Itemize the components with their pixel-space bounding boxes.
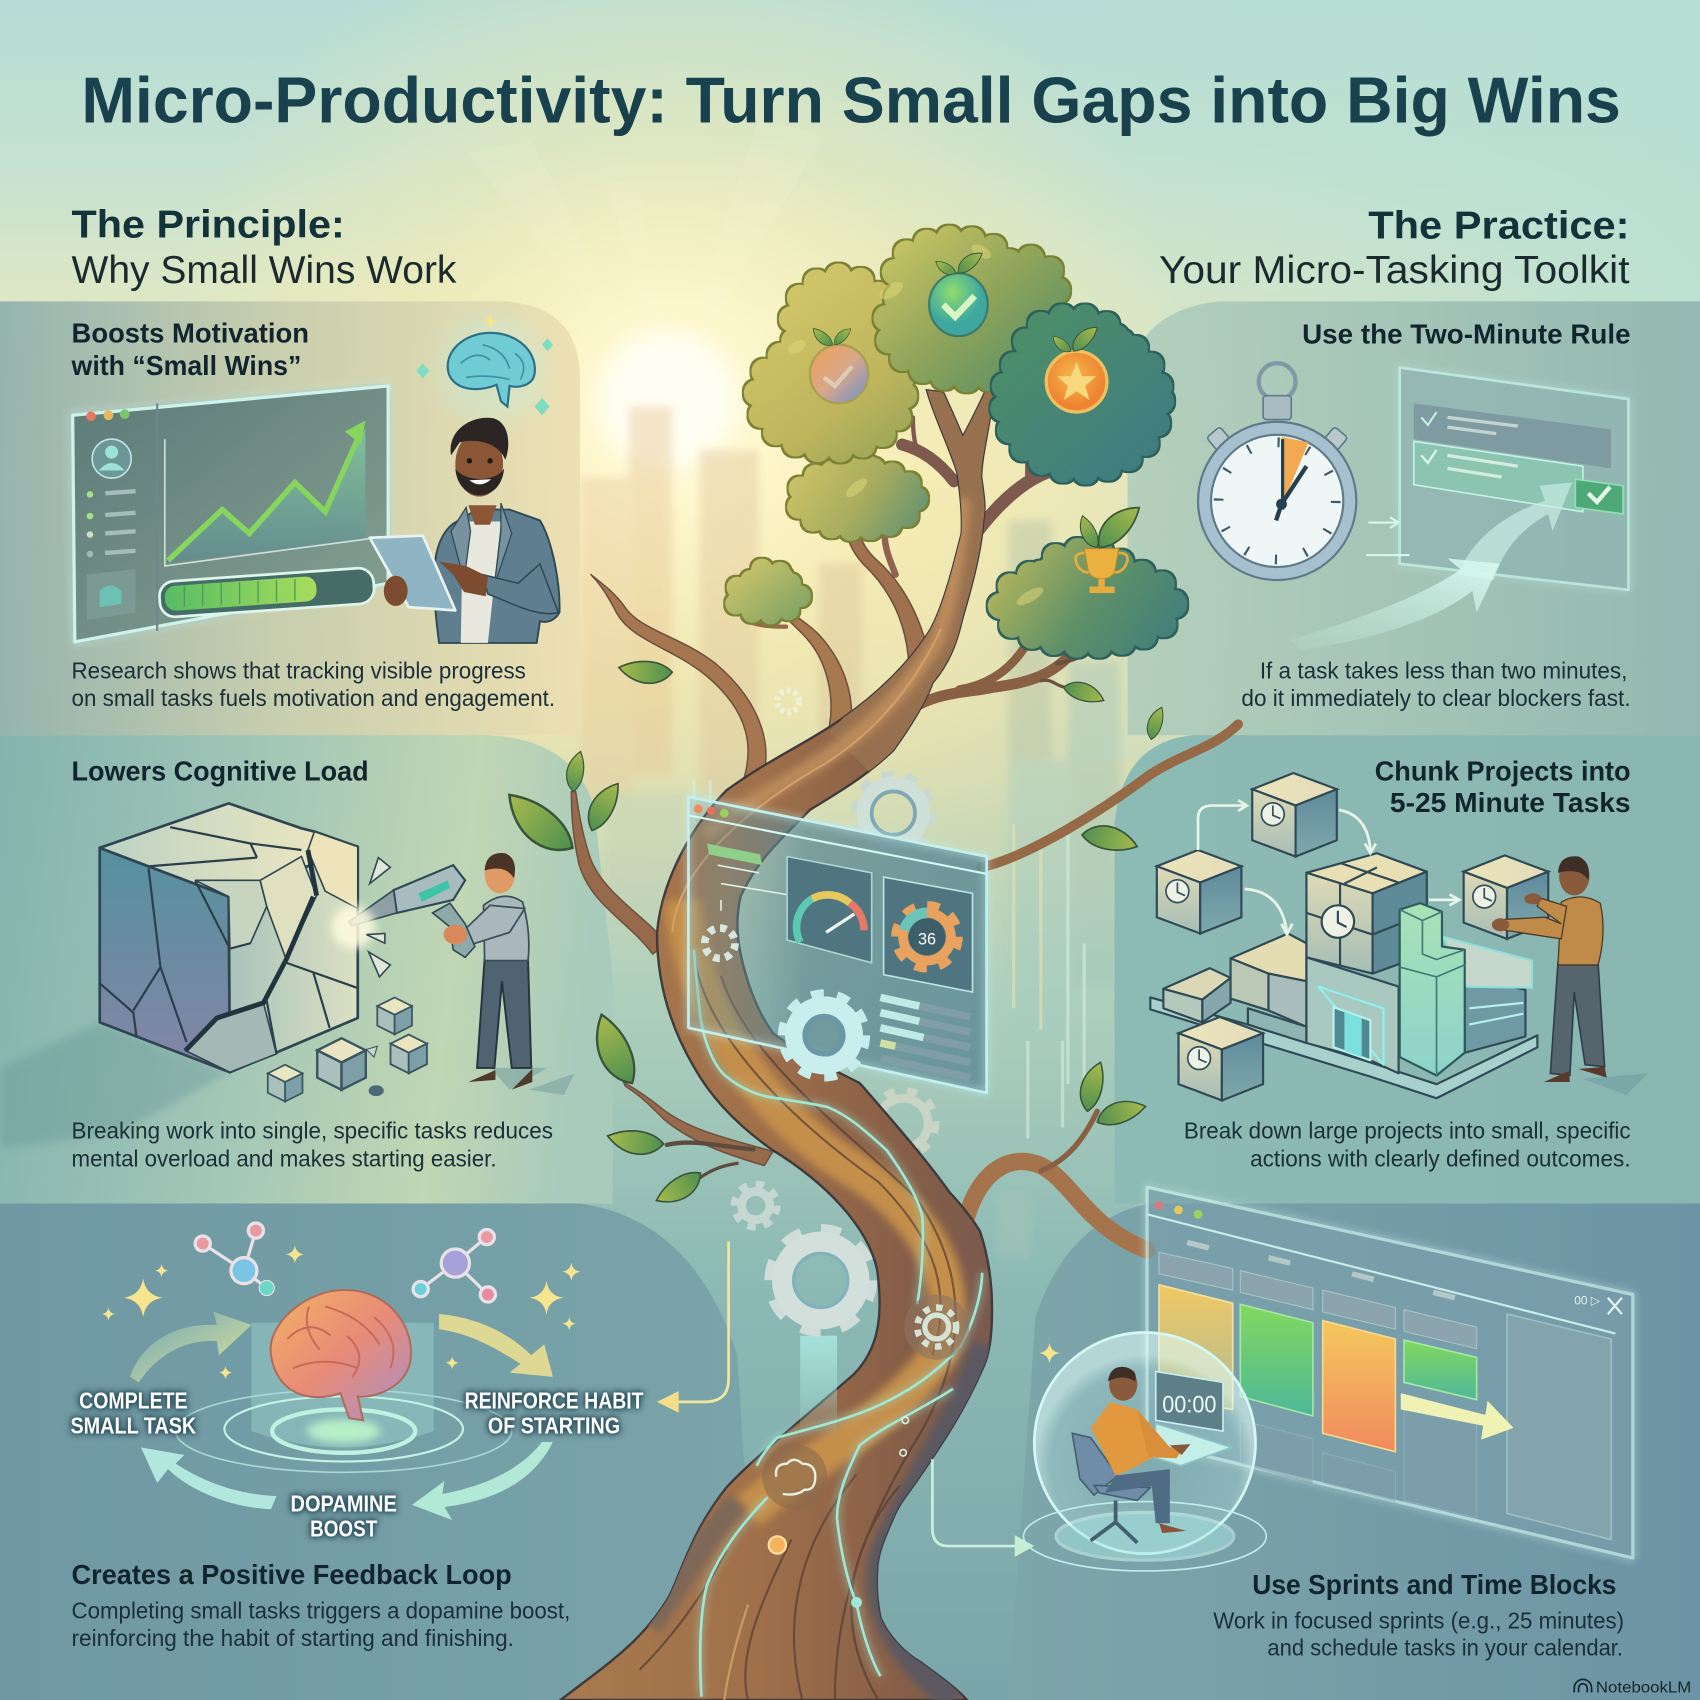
stacked tower cubes	[1306, 853, 1427, 893]
progress arrow	[1401, 1393, 1514, 1440]
card green small	[1404, 1340, 1477, 1400]
isometric building of cubes	[1150, 853, 1537, 1098]
canopy: right dark	[1003, 317, 1161, 472]
panel: chunk projects background	[1115, 735, 1700, 1203]
chunk projects heading: Chunk Projects into	[1375, 755, 1631, 787]
fruit: trophy sprout	[1075, 498, 1146, 593]
creates positive feedback loop text: Creates a Positive Feedback Loop	[72, 1558, 512, 1590]
column headers	[1159, 1242, 1477, 1349]
gear: behind dashboard	[855, 775, 931, 851]
torso and arms	[1558, 897, 1603, 965]
heading: the principle: Why Small Wins Work	[72, 249, 457, 292]
sprints heading and body: Use Sprints and Time Blocks	[1252, 1568, 1617, 1600]
tree trunk	[561, 382, 994, 1700]
desk	[1154, 1424, 1232, 1466]
body: two-minute rule: If a task takes less than two minutes,	[1260, 658, 1627, 684]
green glass tower	[1400, 903, 1465, 1076]
notebooklm watermark: NotebookLM	[1596, 1679, 1691, 1696]
connector arrow to focus bubble	[932, 1459, 1034, 1557]
left widget	[707, 843, 819, 911]
window dots	[694, 804, 729, 817]
body: boosts motivation: Research shows that tracking visible progress	[72, 658, 526, 684]
arm	[464, 905, 525, 945]
card orange	[1323, 1321, 1395, 1452]
broken chunks	[185, 832, 358, 1072]
jacket	[434, 510, 560, 643]
sprints heading and body	[1213, 1568, 1624, 1661]
loop label: reinforce habit: OF STARTING	[488, 1412, 620, 1438]
canopy: left yellow	[757, 276, 904, 450]
head	[1559, 857, 1589, 896]
fruit: orange star	[1046, 321, 1107, 412]
cracked block	[0, 803, 358, 1149]
fruit: green check	[929, 247, 988, 336]
feedback loop diagram	[70, 1223, 644, 1541]
loop label: reinforce habit: REINFORCE HABIT	[465, 1387, 644, 1413]
tablet	[370, 536, 455, 610]
canopy: top centre	[886, 239, 1057, 379]
loop label: dopamine boost: DOPAMINE	[291, 1490, 397, 1516]
card green	[1240, 1304, 1313, 1416]
gears around trunk	[735, 691, 969, 1439]
boosts motivation heading: Boosts Motivation	[72, 317, 309, 349]
growth line	[168, 421, 365, 561]
glowing circuit lines on trunk	[694, 950, 982, 1697]
loop label: complete small task: SMALL TASK	[70, 1412, 197, 1438]
gear: on trunk	[904, 1295, 969, 1360]
sprints heading and body: and schedule tasks in your calendar.	[1267, 1635, 1623, 1661]
heading: the practice: The Practice:	[1368, 205, 1630, 248]
loop label: dopamine boost	[291, 1490, 397, 1541]
arrow: to complete	[141, 1447, 276, 1509]
glowing data lines	[683, 781, 1084, 1138]
cracks	[100, 827, 357, 1054]
torso	[484, 896, 529, 961]
small arrows from stopwatch	[1366, 517, 1409, 555]
progress bar	[158, 567, 375, 618]
window dots	[86, 409, 130, 421]
creates positive feedback loop text	[72, 1558, 570, 1651]
icon: glowing teal brain	[416, 313, 553, 423]
window control glyphs	[1574, 1293, 1622, 1314]
timer: 00:00	[1162, 1392, 1216, 1419]
drill	[349, 865, 475, 957]
head	[455, 432, 503, 497]
card yellow	[1159, 1285, 1233, 1409]
loop label: dopamine boost: BOOST	[310, 1515, 377, 1541]
gear score card: 36	[918, 930, 936, 948]
background city skyline	[580, 407, 1120, 1258]
body: boosts motivation: on small tasks fuels motivation and engagement.	[72, 685, 555, 711]
lowers cognitive load heading: Lowers Cognitive Load	[72, 755, 369, 787]
trunk brain glyph	[762, 1444, 827, 1509]
body: lowers cognitive load	[72, 1117, 553, 1172]
clock on tower	[1322, 905, 1354, 938]
gear: above left branch	[777, 691, 799, 712]
right tall column	[1507, 1314, 1611, 1540]
fruit: apple chart	[809, 325, 868, 403]
loop label: complete small task: COMPLETE	[79, 1387, 188, 1413]
flow arrows	[1198, 800, 1459, 935]
loop label: reinforce habit	[465, 1387, 644, 1438]
low left block	[1163, 968, 1231, 1000]
canopy: lower right	[1001, 551, 1174, 645]
trunk glowing nodes	[769, 1417, 909, 1608]
tree	[496, 239, 1238, 1700]
window control glyphs: 00 ▷	[1574, 1293, 1601, 1307]
shirt	[461, 521, 501, 643]
big white gear	[785, 996, 863, 1074]
boosts motivation heading: with “Small Wins”	[71, 349, 301, 381]
small gear on trunk	[705, 928, 735, 958]
creates positive feedback loop text: reinforcing the habit of starting and finishing.	[72, 1625, 514, 1651]
sidebar tile	[87, 569, 136, 620]
flying shards	[366, 858, 390, 977]
sprints heading and body: Work in focused sprints (e.g., 25 minutes)	[1213, 1607, 1624, 1633]
swoop arrow	[1290, 482, 1572, 651]
central glass dashboard	[688, 797, 987, 1093]
icon: stopwatch	[1198, 363, 1356, 580]
body: boosts motivation	[72, 658, 555, 711]
stepped blocks	[1231, 933, 1306, 981]
icon: colourful brain	[271, 1290, 411, 1420]
spark	[332, 905, 375, 949]
gear: large floating	[771, 1231, 871, 1330]
body: chunk projects: Break down large projects into small, specific	[1184, 1117, 1631, 1143]
arrow: to reinforce	[439, 1314, 553, 1377]
checklist row 2	[1414, 441, 1583, 512]
avatar	[92, 439, 131, 478]
lower empty slots	[1240, 1404, 1477, 1518]
sidebar list	[87, 491, 136, 557]
gear behind tree	[872, 1092, 935, 1155]
title: Micro-Productivity: Turn Small Gaps into Big Wins	[81, 64, 1621, 137]
molecule right	[413, 1229, 495, 1302]
heading: the principle: The Principle:	[72, 203, 345, 246]
right glass wing	[1465, 976, 1525, 1053]
heading: the practice: Your Micro-Tasking Toolkit	[1159, 249, 1630, 292]
gear score card	[884, 877, 973, 992]
body: two-minute rule	[1241, 658, 1631, 711]
heading: the principle	[72, 203, 457, 292]
trunk shading and grain	[640, 379, 984, 1700]
hand holding tablet	[384, 576, 408, 606]
legs	[1550, 963, 1605, 1076]
hologram base	[176, 1323, 512, 1472]
task checklist window	[1290, 368, 1628, 651]
connector arrow to reinforce habit	[657, 1241, 729, 1413]
dashboard with growth chart	[73, 386, 388, 642]
person with drill	[332, 853, 575, 1095]
seated person	[1091, 1367, 1190, 1533]
boosts motivation heading	[71, 317, 309, 381]
panel: two-minute rule background	[1128, 301, 1700, 735]
task cubes with clocks	[1157, 773, 1548, 1100]
gauge card	[787, 857, 872, 963]
small cubes rubble	[268, 997, 427, 1102]
body: chunk projects	[1184, 1117, 1631, 1172]
canopy: small left	[733, 569, 800, 614]
doorway	[1334, 1007, 1370, 1060]
chunk projects heading: 5-25 Minute Tasks	[1390, 786, 1631, 818]
head	[485, 854, 515, 893]
panel: sprints background	[1008, 1203, 1700, 1700]
person with tablet	[370, 418, 560, 643]
body: chunk projects: actions with clearly defined outcomes.	[1250, 1146, 1631, 1172]
leaves	[496, 659, 1167, 1211]
hands and shoes	[1492, 918, 1509, 931]
panel: feedback loop background	[0, 1203, 759, 1700]
chair	[1072, 1433, 1150, 1543]
focus bubble with person	[1023, 1332, 1266, 1571]
window dots	[1155, 1201, 1202, 1219]
person placing cube	[1492, 856, 1648, 1095]
gear: small floating	[735, 1185, 776, 1226]
canopy: middle	[797, 466, 916, 529]
list bars	[880, 997, 970, 1078]
sleeve and pointing hand	[482, 564, 558, 614]
lapels	[451, 503, 512, 585]
creates positive feedback loop text: Completing small tasks triggers a dopamine boost,	[72, 1598, 570, 1624]
tower base facade	[1306, 957, 1399, 1073]
chart axes and area	[171, 428, 365, 562]
canopy highlights	[786, 241, 1046, 609]
hand on drill	[443, 925, 467, 944]
arrow: to brain	[130, 1312, 252, 1382]
arrow: to dopamine	[412, 1442, 553, 1520]
sparkles	[102, 1245, 580, 1379]
two-minute rule heading: Use the Two-Minute Rule	[1302, 318, 1631, 350]
shoes	[468, 1069, 532, 1090]
platform	[1150, 997, 1537, 1098]
tree branches	[571, 518, 930, 1165]
check badge	[1575, 479, 1623, 514]
loop label: complete small task	[70, 1387, 197, 1438]
chunk projects heading	[1375, 755, 1631, 818]
body: lowers cognitive load: mental overload and makes starting easier.	[72, 1146, 497, 1172]
timer	[1156, 1371, 1223, 1431]
calendar window	[1147, 1187, 1633, 1558]
panel: boosts motivation background	[0, 301, 580, 735]
panel: lowers cognitive load background	[0, 735, 613, 1203]
body: two-minute rule: do it immediately to clear blockers fast.	[1241, 685, 1631, 711]
gear stem light	[800, 1336, 837, 1439]
heading: the practice	[1159, 205, 1630, 292]
molecule left	[195, 1223, 274, 1296]
body: lowers cognitive load: Breaking work into single, specific tasks reduces	[72, 1117, 553, 1143]
checklist row 1	[1414, 403, 1611, 468]
legs	[477, 958, 531, 1068]
